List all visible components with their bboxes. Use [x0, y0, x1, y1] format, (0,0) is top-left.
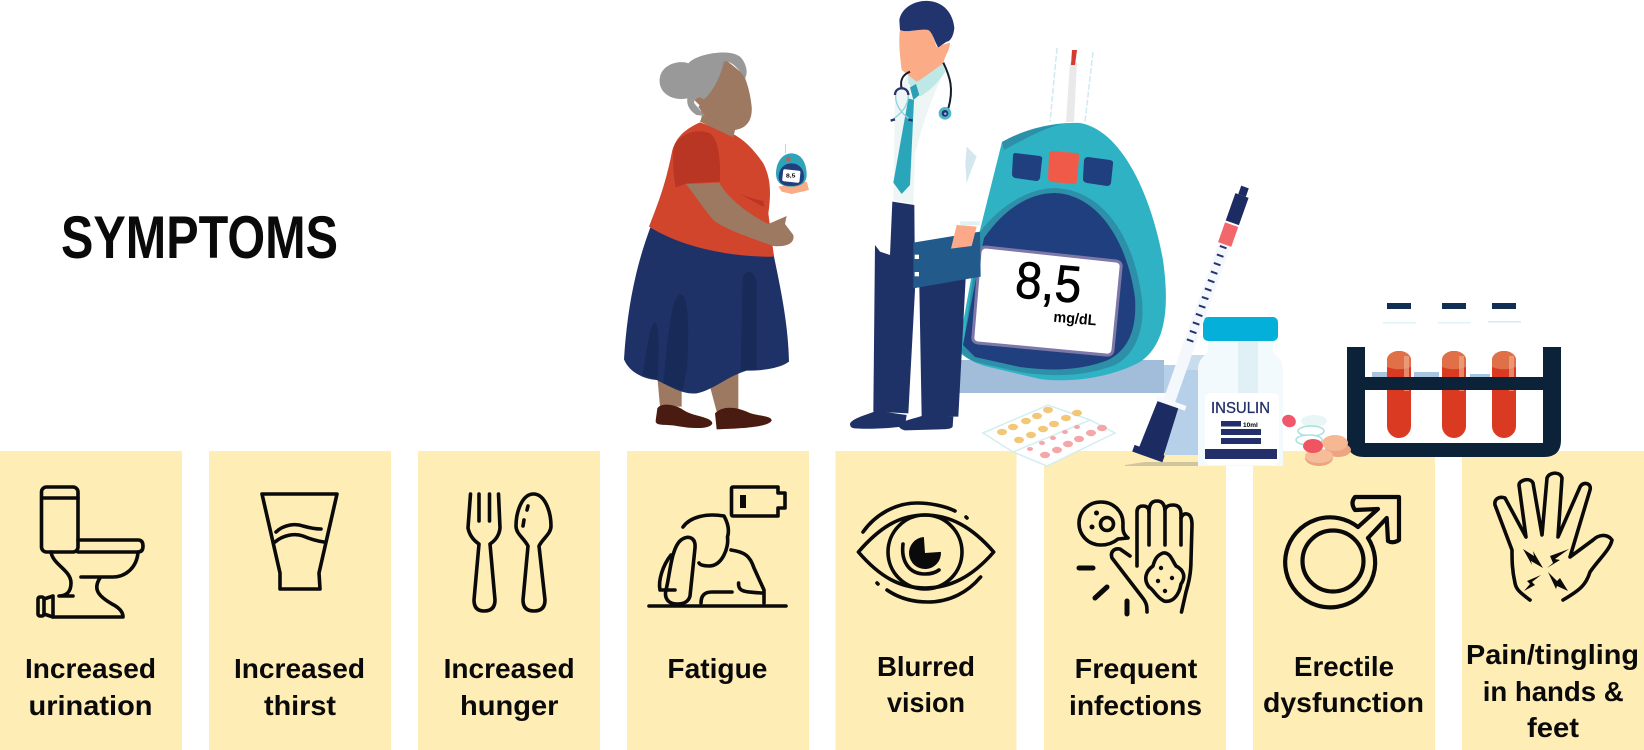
label: vision [887, 687, 965, 718]
title: SYMPTOMS [61, 204, 338, 271]
illustration: insulin pen [1132, 181, 1262, 464]
label: Frequent [1075, 653, 1197, 684]
icon: male symbol [1285, 497, 1399, 607]
label [444, 653, 575, 721]
icon: eye [858, 503, 994, 602]
panel: pain and tingling [1462, 451, 1644, 750]
illustration: test tube rack [1347, 303, 1561, 457]
label [877, 651, 975, 718]
panel: erectile dysfunction [1253, 451, 1435, 750]
label: urination [28, 690, 152, 721]
icon: toilet [38, 487, 143, 617]
label: Pain/tingling [1466, 639, 1639, 670]
icon: glass of water [262, 494, 337, 589]
vial label: INSULIN [1211, 400, 1270, 417]
woman's handheld meter [776, 144, 809, 194]
label: Increased [444, 653, 575, 684]
label [25, 653, 156, 721]
stethoscope [891, 63, 951, 121]
panel: fatigue [627, 451, 809, 750]
label: in hands & [1483, 676, 1624, 707]
illustration: doctor [850, 1, 981, 430]
vial label: 10ml [1243, 422, 1258, 429]
icon: hand with lightning [1495, 473, 1612, 600]
label: Increased [25, 653, 156, 684]
meter reading: 8,5 [1013, 251, 1084, 315]
label [1263, 651, 1424, 718]
woman's handheld meter: 8,5 [786, 174, 795, 180]
panel: frequent infections [1044, 451, 1226, 750]
label: Blurred [877, 651, 975, 682]
label [1069, 653, 1202, 721]
illustration: insulin vial [1125, 317, 1283, 466]
label: hunger [460, 690, 559, 721]
label: infections [1069, 690, 1202, 721]
panel: blurred vision [836, 451, 1016, 750]
label: Fatigue [667, 653, 767, 684]
illustration: pills [1280, 413, 1351, 466]
panel: increased urination [0, 451, 182, 750]
icon: tired person with low battery [649, 487, 786, 606]
vial label [1205, 400, 1277, 459]
panel: increased hunger [418, 451, 600, 750]
illustration: blister packs [983, 405, 1115, 466]
label: Erectile [1294, 651, 1394, 682]
meter reading: mg/dL [1053, 309, 1097, 329]
label: feet [1527, 712, 1579, 743]
icon: infected hand [1079, 501, 1192, 614]
label [1466, 639, 1639, 743]
label: dysfunction [1263, 687, 1424, 718]
label: Increased [234, 653, 365, 684]
illustration: glucose meter [950, 48, 1166, 393]
label: thirst [264, 690, 336, 721]
illustration: woman [624, 52, 809, 429]
panel: increased thirst [209, 451, 391, 750]
icon: fork and spoon [468, 494, 551, 611]
label [234, 653, 365, 721]
